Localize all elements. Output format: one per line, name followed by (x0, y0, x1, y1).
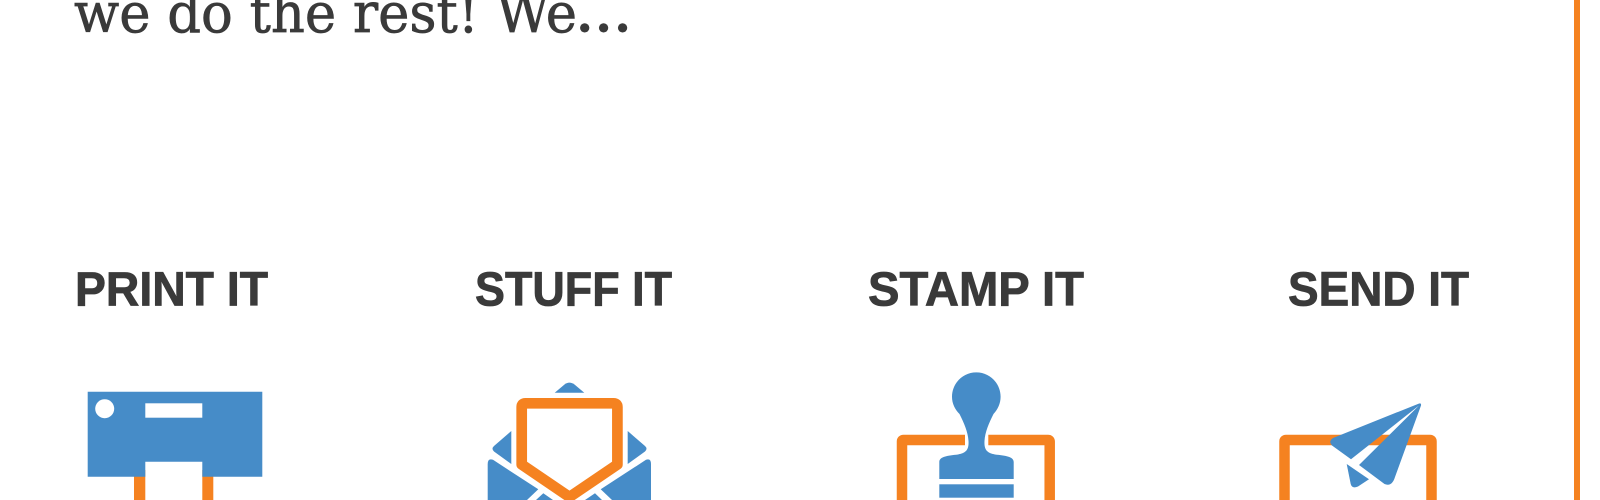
vertical divider (1574, 0, 1580, 500)
heading: print it: PRINT IT (75, 264, 268, 316)
heading: stuff it: STUFF IT (475, 264, 672, 316)
icon: paper plane on frame (1284, 403, 1432, 500)
heading: stamp it: STAMP IT (868, 264, 1084, 316)
heading: send it: SEND IT (1288, 264, 1469, 316)
icon: rubber stamp on frame (902, 372, 1050, 500)
icon: printer (88, 392, 262, 500)
icon: envelope with letter (488, 383, 651, 500)
